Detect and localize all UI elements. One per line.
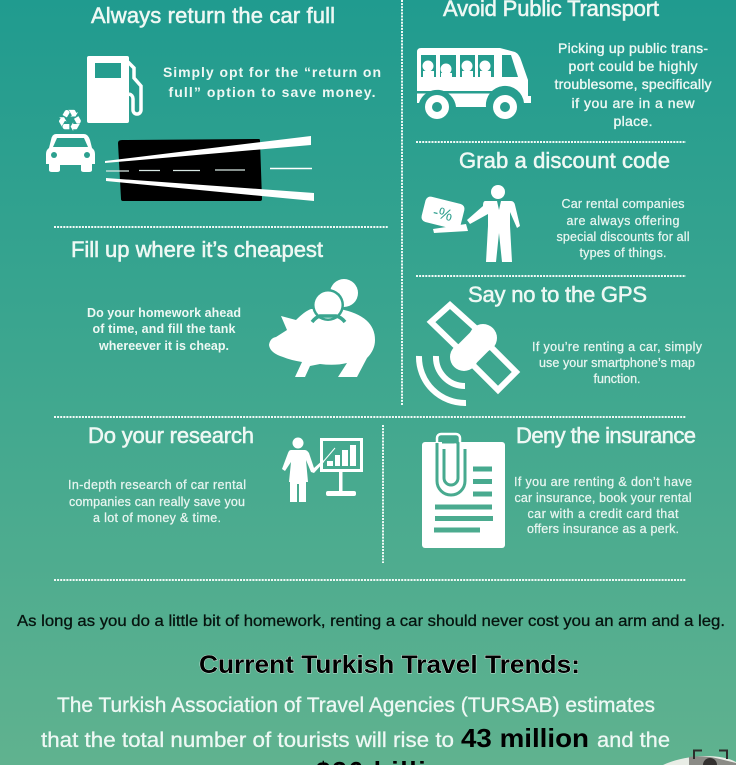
text: discount: are always offering [566, 214, 680, 228]
text: research [68, 478, 246, 525]
text: discount: types of things. [580, 246, 666, 260]
text: gps: function. [594, 372, 640, 386]
text: homework: Do your homework ahead [87, 306, 241, 320]
text block: travel trends: 43 million [461, 723, 589, 753]
text: insurance: offers insurance as a perk. [527, 522, 679, 536]
text: public transport: port could be highly [568, 58, 698, 74]
icon: car [46, 134, 95, 172]
panel: grab a discount code [420, 148, 690, 262]
text block: travel trends [41, 693, 670, 765]
text: return on full: full” option to save money. [168, 84, 376, 100]
closing sentence: As long as you do a little bit of homework, renting a car should never cost you an arm and a leg. [17, 613, 725, 630]
panel: do your research [68, 423, 362, 525]
text: research: a lot of money & time. [93, 511, 221, 525]
panel: avoid public transport [417, 0, 712, 129]
text block: travel trends: The Turkish Association of Travel Agencies (TURSAB) estimates [57, 693, 655, 717]
heading: fill up where it's cheapest: Fill up where it’s cheapest [71, 237, 323, 262]
icon: cropped camera at bottom edge [663, 750, 736, 765]
panel: always return the car full [46, 3, 381, 201]
text: insurance: If you are renting & don’t have [514, 475, 692, 489]
text block: travel trends: that the total number of tourists will rise to [41, 728, 454, 752]
panel: fill up where it's cheapest [71, 237, 375, 377]
heading: do your research: Do your research [88, 423, 254, 448]
text: homework [87, 306, 241, 353]
text: public transport: if you are in a new [572, 95, 695, 111]
heading: grab a discount code: Grab a discount code [459, 148, 670, 173]
heading: deny the insurance: Deny the insurance [516, 423, 696, 448]
panel: deny the insurance [422, 423, 696, 548]
icon: document with paperclip [422, 434, 505, 548]
text: public transport: Picking up public trans- [558, 40, 708, 56]
text: public transport: troublesome, specifically [554, 76, 712, 92]
heading: always return the car full: Always return the car full [91, 3, 335, 28]
text: public transport: place. [614, 113, 652, 129]
text: research: companies can really save you [69, 495, 245, 509]
text: gps [532, 340, 703, 386]
heading: current turkish travel trends: Current Turkish Travel Trends: [199, 651, 580, 679]
text: insurance [514, 475, 692, 536]
text: public transport [554, 40, 712, 129]
text: gps: If you’re renting a car, simply [532, 340, 703, 354]
icon: recycling symbol: ♻ [57, 104, 83, 139]
text: insurance: car with a credit card that [528, 507, 679, 521]
text: homework: of time, and fill the tank [92, 322, 236, 336]
text: homework: whereever it is cheap. [98, 339, 229, 353]
icon: man with discount coupon [420, 185, 520, 262]
text: research: In-depth research of car rental [68, 478, 246, 492]
heading: say no to the gps: Say no to the GPS [468, 282, 647, 307]
icon: piggy bank [269, 279, 375, 377]
text block: travel trends: and the [597, 728, 670, 752]
text: gps: use your smartphone’s map [539, 356, 695, 370]
text: discount: Car rental companies [562, 197, 684, 211]
text: return on full: Simply opt for the “return on [163, 64, 381, 80]
icon: woman presenting chart [282, 438, 362, 502]
icon: man with discount coupon: -% [431, 204, 454, 225]
icon: satellite [419, 305, 516, 403]
panel: say no to the gps [419, 282, 703, 403]
text: discount [556, 197, 690, 260]
text: discount: special discounts for all [556, 230, 690, 244]
icon: fuel pump [87, 56, 141, 123]
text: return on full [163, 64, 381, 100]
icon: road [105, 136, 314, 201]
text: insurance: car insurance, book your rental [514, 491, 692, 505]
icon: bus [417, 48, 531, 119]
